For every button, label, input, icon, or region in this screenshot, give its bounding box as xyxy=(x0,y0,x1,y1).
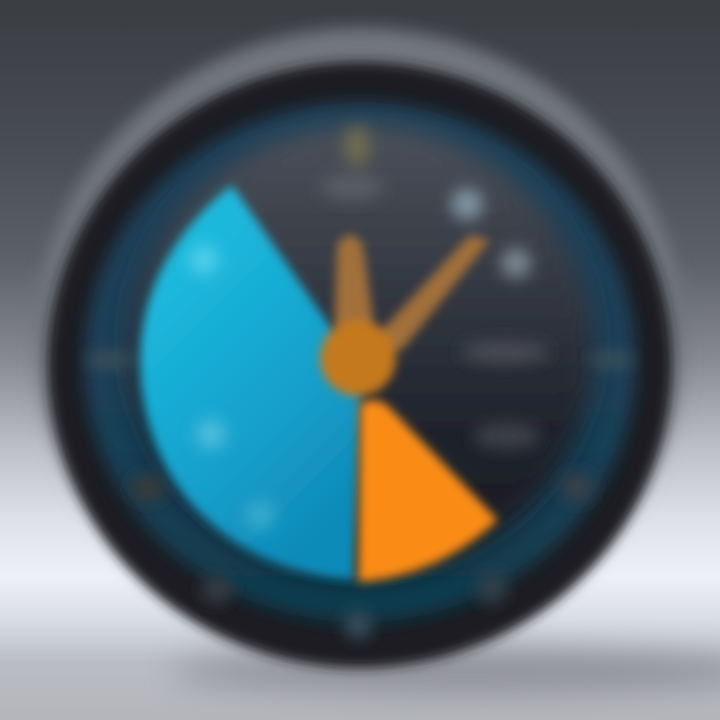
hub xyxy=(320,320,396,396)
black ring xyxy=(48,62,672,668)
top triangle marker xyxy=(344,126,370,166)
divider line between sectors xyxy=(354,420,358,580)
tick marks xyxy=(86,126,634,639)
inner face xyxy=(130,124,594,576)
orange sector xyxy=(358,400,498,582)
clock hands xyxy=(320,235,490,396)
floor shadow xyxy=(170,650,720,694)
outer bezel xyxy=(34,28,686,664)
label under marker xyxy=(320,175,384,199)
highlights on blue sector xyxy=(189,245,275,530)
blue sector xyxy=(140,185,362,580)
right panel labels xyxy=(461,341,549,449)
light marks on dark face xyxy=(451,188,531,278)
dial ring xyxy=(84,102,636,622)
